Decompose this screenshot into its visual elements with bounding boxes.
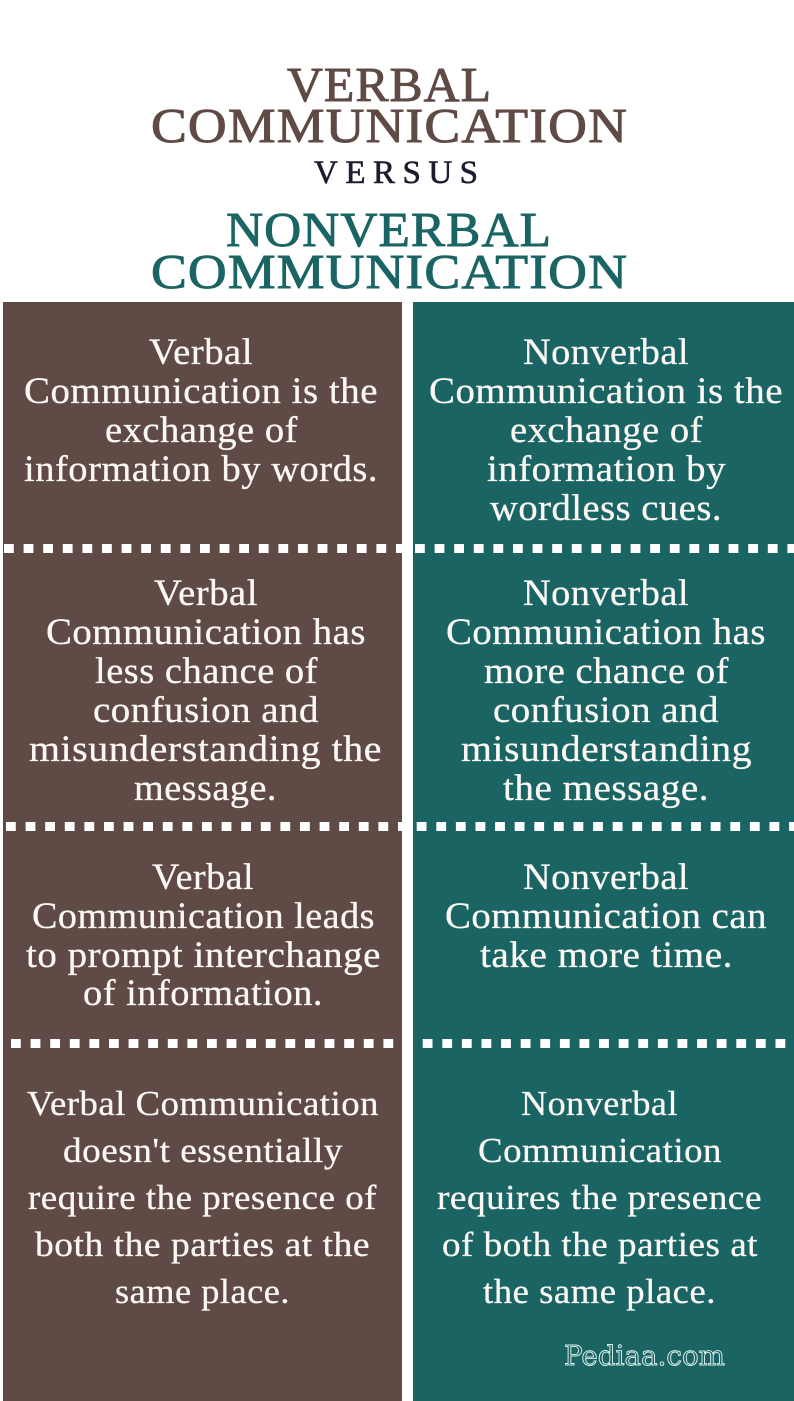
- title: nonverbal communication: COMMUNICATION: [151, 244, 628, 299]
- text: row 2 verbal: message.: [134, 768, 277, 809]
- text: row 2 verbal: Communication has: [46, 612, 366, 653]
- text: row 2 nonverbal: Nonverbal: [523, 573, 689, 614]
- text: row 1 nonverbal: exchange of: [510, 410, 703, 451]
- text: row 1 nonverbal: Communication is the: [429, 371, 783, 412]
- text: row 4 nonverbal: requires the presence: [437, 1178, 762, 1217]
- text: row 3 verbal: of information.: [83, 973, 323, 1014]
- text: row 4 verbal: doesn't essentially: [63, 1131, 343, 1170]
- text: row 3 verbal: Communication leads: [32, 896, 375, 937]
- text: row 2 verbal: misunderstanding the: [29, 729, 382, 770]
- text: row 1 verbal: [24, 332, 378, 490]
- watermark: Pediaa.com: Pediaa.com: [564, 1341, 725, 1372]
- versus label: VERSUS: [314, 155, 478, 191]
- text: row 2 nonverbal: confusion and: [493, 690, 719, 731]
- text: row 3 verbal: [26, 857, 381, 1014]
- text: row 1 verbal: Communication is the: [24, 371, 378, 412]
- text: row 2 nonverbal: misunderstanding: [461, 729, 752, 770]
- text: row 4 nonverbal: [437, 1084, 762, 1311]
- title: nonverbal communication: [151, 202, 628, 299]
- text: row 4 nonverbal: the same place.: [483, 1272, 716, 1311]
- text: row 4 verbal: require the presence of: [28, 1178, 377, 1217]
- title: verbal communication: VERBAL: [287, 57, 492, 112]
- text: row 1 verbal: exchange of: [105, 410, 298, 451]
- text: row 4 verbal: Verbal Communication: [27, 1084, 379, 1123]
- title block: [151, 57, 628, 299]
- text: row 2 verbal: confusion and: [93, 690, 319, 731]
- panel: verbal column background: [3, 302, 402, 1401]
- text: row 4 nonverbal: Nonverbal: [521, 1084, 678, 1123]
- text: row 2 verbal: [29, 573, 382, 809]
- text: row 1 nonverbal: [429, 332, 783, 529]
- text: row 2 verbal: Verbal: [154, 573, 258, 614]
- text: row 1 nonverbal: Nonverbal: [523, 332, 689, 373]
- title: nonverbal communication: NONVERBAL: [226, 202, 552, 257]
- text: row 4 verbal: same place.: [115, 1272, 290, 1311]
- text: row 4 verbal: both the parties at the: [35, 1225, 370, 1264]
- panel: nonverbal column background: [413, 302, 794, 1401]
- text: row 1 nonverbal: information by: [487, 449, 726, 490]
- text: row 1 verbal: Verbal: [149, 332, 253, 373]
- text: row 2 nonverbal: [446, 573, 766, 809]
- text: row 4 verbal: [27, 1084, 379, 1311]
- title: verbal communication: [151, 57, 628, 153]
- text: row 2 nonverbal: more chance of: [484, 651, 729, 692]
- text: row 1 verbal: information by words.: [24, 449, 378, 490]
- text: row 4 nonverbal: Communication: [478, 1131, 722, 1170]
- text: row 2 nonverbal: Communication has: [446, 612, 766, 653]
- row separators: [4, 548, 794, 1044]
- text: row 1 nonverbal: wordless cues.: [490, 488, 722, 529]
- text: row 3 nonverbal: [445, 857, 767, 976]
- text: row 3 nonverbal: Nonverbal: [523, 857, 689, 898]
- title: verbal communication: COMMUNICATION: [151, 98, 628, 153]
- text: row 4 nonverbal: of both the parties at: [442, 1225, 758, 1264]
- text: row 2 verbal: less chance of: [95, 651, 318, 692]
- text: row 3 nonverbal: take more time.: [480, 935, 733, 976]
- text: row 3 verbal: to prompt interchange: [26, 935, 381, 976]
- text: row 3 nonverbal: Communication can: [445, 896, 767, 937]
- text: row 2 nonverbal: the message.: [503, 768, 709, 809]
- text: row 3 verbal: Verbal: [152, 857, 254, 898]
